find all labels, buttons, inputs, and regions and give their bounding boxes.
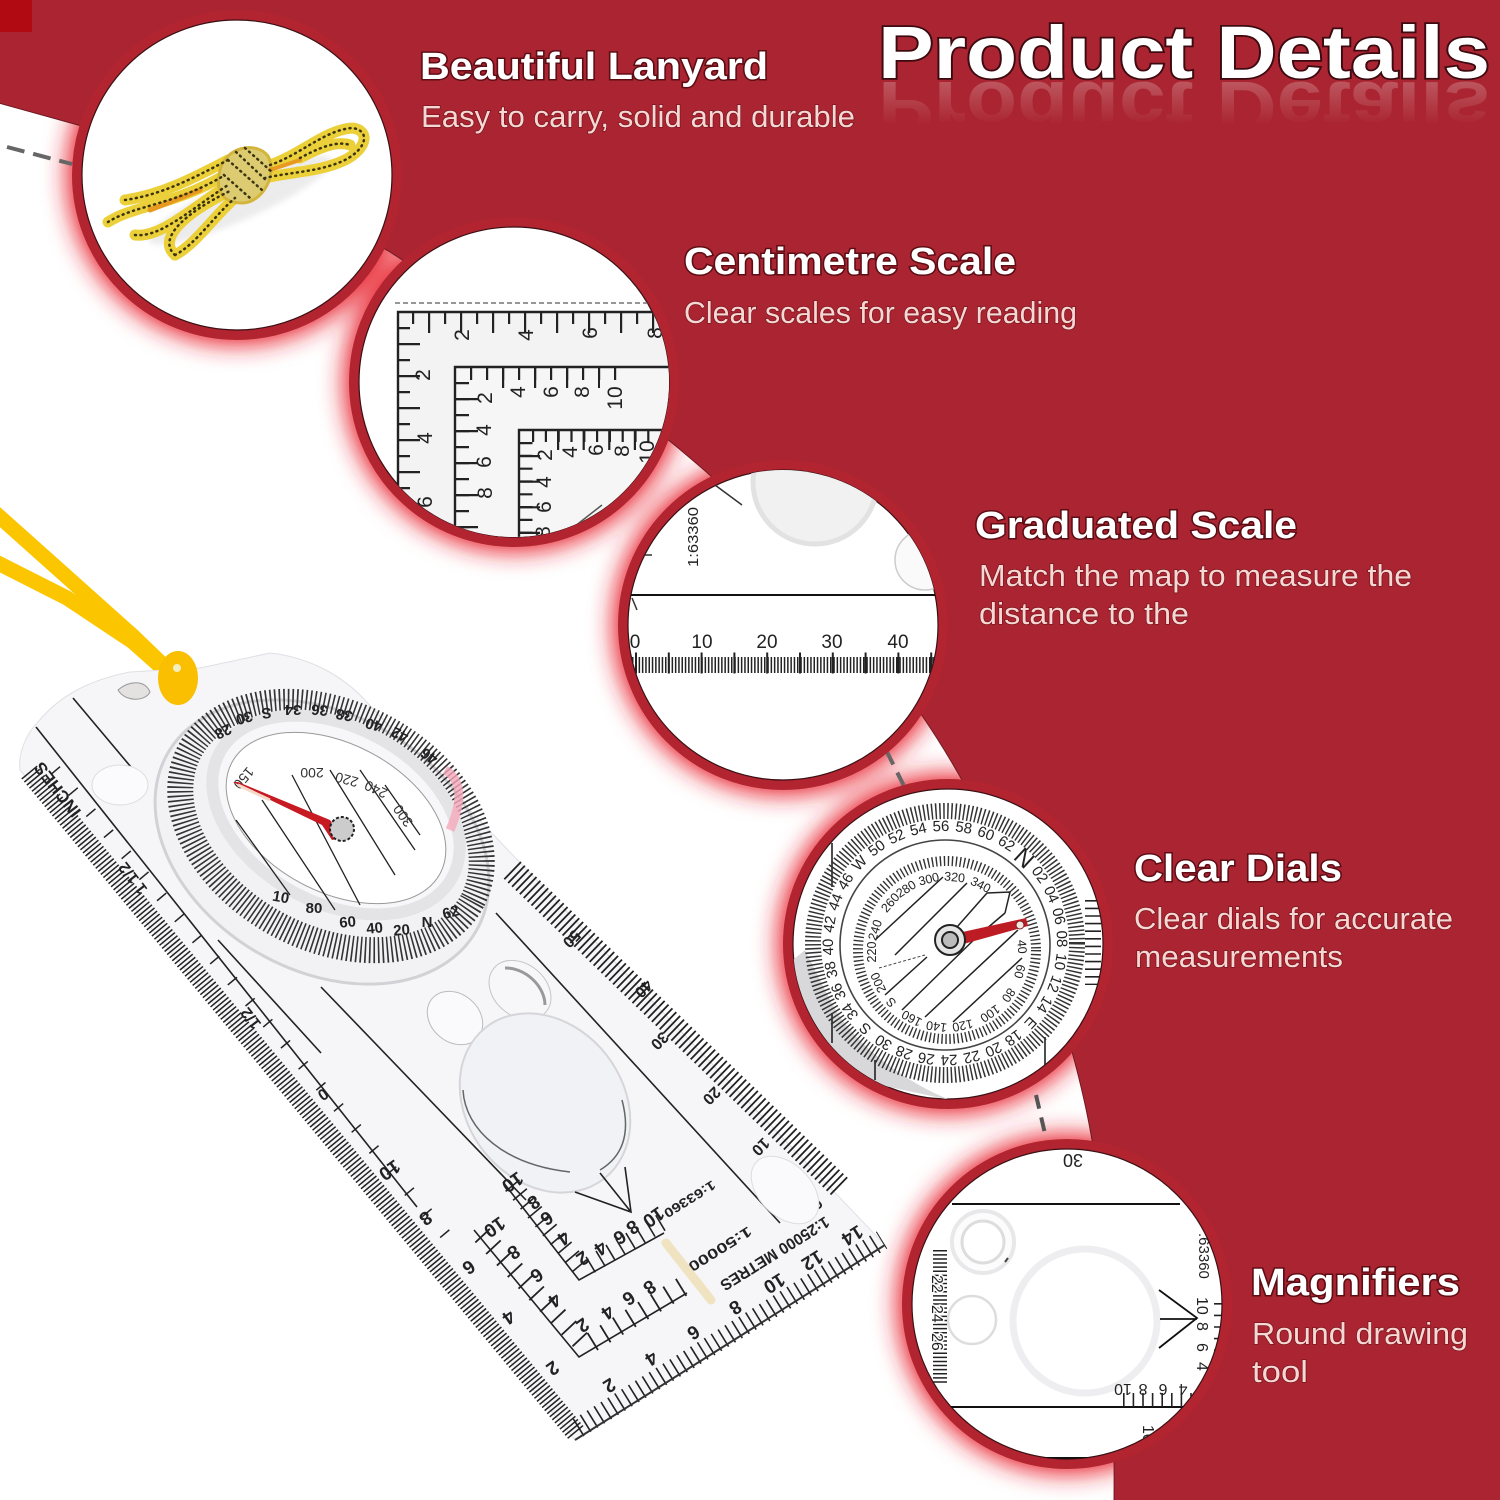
inner dial numbers: 300 bbox=[390, 802, 416, 830]
compass baseplate bbox=[20, 651, 885, 1440]
magnifier detail: 22 bbox=[928, 1275, 945, 1293]
dial detail: 220 bbox=[865, 942, 879, 962]
dial detail: 08 bbox=[1053, 930, 1070, 948]
icon: lanyard knot on plate bbox=[118, 651, 198, 705]
graduated scale detail: 40 bbox=[887, 632, 909, 653]
magnifier detail: 10 bbox=[1193, 1297, 1210, 1315]
graduated scale detail bbox=[630, 470, 936, 674]
glow halos around circles bbox=[67, 5, 1237, 1474]
magnifier detail: 10 bbox=[1139, 1425, 1156, 1443]
icon: coiled yellow cord bbox=[108, 128, 364, 255]
scale detail: 4 bbox=[559, 446, 582, 458]
dial detail: 200 bbox=[868, 970, 889, 995]
text block: Magnifiers bbox=[1251, 1262, 1468, 1389]
magnifier detail: 24 bbox=[928, 1305, 945, 1323]
text block: Beautiful Lanyard: Easy to carry, solid and durable bbox=[421, 99, 855, 134]
bottom ruler with numbers: 14 bbox=[837, 1220, 866, 1249]
scale detail: 6 bbox=[414, 496, 437, 508]
inner dial numbers: 200 bbox=[300, 765, 324, 781]
dial detail: 62 bbox=[995, 832, 1018, 856]
dial detail: 320 bbox=[943, 869, 966, 885]
text block: Clear Dials: Clear dials for accurate bbox=[1134, 901, 1453, 936]
magnifier detail: 26 bbox=[928, 1333, 945, 1351]
magnifier detail: 6 bbox=[1193, 1343, 1210, 1352]
left ruler: inch ticks bbox=[29, 758, 577, 1434]
text block: Magnifiers: Round drawing bbox=[1252, 1316, 1468, 1351]
bottom ruler with numbers: 8 bbox=[725, 1295, 745, 1318]
scale labels: 1:25000 METRES bbox=[717, 1213, 832, 1293]
outer square scale: 6 bbox=[526, 1263, 547, 1286]
dial detail: 38 bbox=[821, 960, 842, 980]
text block: Centimetre Scale: Centimetre Scale bbox=[684, 241, 1016, 283]
magnifier detail: 30 bbox=[1063, 1150, 1083, 1170]
left lower numbers: 4 bbox=[497, 1305, 519, 1328]
scale detail: 6 bbox=[473, 456, 496, 468]
left ruler: inch ticks: INCHES bbox=[30, 758, 85, 821]
dial detail: 46 bbox=[834, 870, 858, 893]
text block: Clear Dials bbox=[1134, 848, 1453, 974]
scale detail: 2 bbox=[474, 392, 497, 404]
scale detail: 8 bbox=[532, 526, 555, 538]
scale detail: 6 bbox=[579, 327, 602, 339]
bottom ruler with numbers: 6 bbox=[683, 1320, 703, 1343]
dial detail: 44 bbox=[825, 891, 847, 913]
text block: Magnifiers: tool bbox=[1252, 1354, 1308, 1389]
dial detail: 120 bbox=[951, 1016, 974, 1034]
right ruler: centimetre ticks bbox=[512, 870, 840, 1212]
dial detail: 22 bbox=[962, 1046, 982, 1067]
bezel numbers: 46 bbox=[418, 744, 441, 767]
scale detail: 2 bbox=[451, 329, 474, 341]
bottom ruler with numbers: 10 bbox=[759, 1268, 788, 1297]
dial detail: 06 bbox=[1048, 906, 1069, 926]
inner dial numbers bbox=[230, 764, 416, 830]
bezel numbers: 80 bbox=[306, 900, 322, 917]
dial detail: 50 bbox=[865, 837, 889, 860]
right ruler: centimetre ticks: 0 bbox=[807, 1194, 825, 1212]
outer square scale: 6 bbox=[618, 1286, 639, 1309]
dial detail: 52 bbox=[886, 826, 908, 848]
dial detail: 40 bbox=[1014, 939, 1029, 954]
dial detail: 10 bbox=[1050, 952, 1070, 971]
bezel numbers: 28 bbox=[212, 720, 234, 742]
graduated scale detail: 30 bbox=[821, 632, 843, 653]
dial detail: 14 bbox=[1032, 993, 1056, 1016]
outer square scale: 4 bbox=[543, 1288, 565, 1311]
bottom ruler with numbers: 12 bbox=[797, 1245, 826, 1274]
orienting lines bbox=[236, 770, 420, 910]
text block: Clear Dials: measurements bbox=[1135, 939, 1343, 974]
outer square scale: 4 bbox=[596, 1300, 618, 1323]
dial detail: 04 bbox=[1040, 884, 1062, 906]
inner square scale bbox=[497, 1167, 668, 1280]
text block: Graduated Scale bbox=[975, 505, 1412, 631]
dial detail: 80 bbox=[999, 985, 1018, 1005]
bezel numbers: 20 bbox=[393, 921, 411, 940]
dial detail: 100 bbox=[977, 1002, 1003, 1025]
dial detail: 20 bbox=[982, 1038, 1004, 1060]
outer square scale: 8 bbox=[639, 1275, 660, 1298]
bezel numbers: 10 bbox=[271, 888, 290, 907]
dial detail: S bbox=[883, 994, 899, 1010]
inner square scale: 6 bbox=[536, 1206, 557, 1229]
bezel numbers: 36 bbox=[311, 700, 329, 719]
dashed connector: circle 4 to 5 bbox=[1036, 1095, 1046, 1138]
bezel numbers: 42 bbox=[389, 723, 411, 745]
left lower numbers bbox=[374, 1155, 563, 1379]
scale detail: 4 bbox=[473, 424, 496, 436]
magnifier detail: 6 bbox=[1158, 1380, 1167, 1397]
title bbox=[878, 11, 1490, 149]
inner square scale: 8 bbox=[622, 1215, 643, 1238]
text block: Magnifiers: Magnifiers bbox=[1251, 1262, 1460, 1304]
corner square bbox=[0, 0, 32, 32]
inner square scale: 6 bbox=[609, 1225, 630, 1248]
outer square scale: 8 bbox=[503, 1240, 524, 1263]
dial detail: 54 bbox=[908, 819, 928, 840]
scale detail: 10 bbox=[604, 386, 627, 410]
dial detail: 56 bbox=[932, 818, 950, 835]
graduated scale detail: 10 bbox=[691, 632, 713, 653]
bezel numbers bbox=[212, 700, 461, 940]
outer square scale bbox=[474, 1212, 687, 1357]
scale detail: 2 bbox=[412, 369, 435, 381]
magnifier detail: 4 bbox=[1178, 1380, 1187, 1397]
dial detail: 280 bbox=[894, 878, 919, 901]
outer square scale: 2 bbox=[572, 1313, 593, 1336]
plate body bbox=[20, 653, 885, 1440]
outer square scale: 10 bbox=[479, 1212, 509, 1241]
bezel numbers: 62 bbox=[441, 902, 461, 923]
title: Product Details bbox=[878, 11, 1490, 94]
dial detail: 18 bbox=[1001, 1026, 1025, 1049]
circle 5: magnifiers bbox=[907, 1144, 1227, 1464]
scale labels: 1:50000 bbox=[685, 1223, 755, 1275]
dial detail: S bbox=[856, 1019, 875, 1038]
scale detail: 4 bbox=[515, 329, 538, 341]
dial detail: 60 bbox=[1011, 963, 1028, 980]
bezel numbers: 38 bbox=[335, 705, 354, 724]
left lower numbers: 8 bbox=[415, 1206, 436, 1229]
text block: Beautiful Lanyard: Beautiful Lanyard bbox=[420, 46, 768, 88]
circle 2: centimetre scale bbox=[354, 222, 698, 552]
pink fluid bbox=[445, 770, 459, 830]
dial detail: 34 bbox=[839, 999, 862, 1023]
text block: Graduated Scale: Graduated Scale bbox=[975, 505, 1297, 547]
right ruler: centimetre ticks: 30 bbox=[647, 1028, 671, 1053]
right ruler: centimetre ticks: 40 bbox=[631, 976, 655, 1001]
compass capsule bbox=[104, 642, 540, 1042]
dial detail: 300 bbox=[917, 870, 941, 889]
left ruler: inch ticks: 0 bbox=[314, 1084, 331, 1103]
left lower numbers: 6 bbox=[458, 1255, 479, 1278]
degree tick ring bbox=[137, 652, 525, 1000]
scale detail: 4 bbox=[533, 476, 556, 488]
magnifier detail: :63360 bbox=[1195, 1233, 1212, 1279]
bezel numbers: 30 bbox=[234, 707, 254, 728]
icon: red compass needle bbox=[233, 782, 354, 841]
icon: red needle bbox=[935, 918, 1028, 955]
scale detail: 4 bbox=[507, 386, 530, 398]
magnifier detail: 4 bbox=[1193, 1362, 1210, 1371]
bottom ruler with numbers: 4 bbox=[641, 1346, 661, 1370]
lanyard cord bbox=[0, 510, 160, 666]
inner square scale: 8 bbox=[523, 1190, 544, 1213]
inner square scale: 4 bbox=[589, 1236, 611, 1259]
bezel numbers: 40 bbox=[364, 714, 384, 735]
left ruler: inch ticks: 1/2 bbox=[238, 1004, 265, 1032]
inner square scale: 10 bbox=[497, 1167, 527, 1196]
scale detail: 10 bbox=[636, 440, 659, 464]
magnifier detail: 10 bbox=[1114, 1380, 1132, 1397]
dial detail: 40 bbox=[820, 938, 837, 956]
scale detail: 6 bbox=[533, 501, 556, 513]
dial detail: 26 bbox=[917, 1048, 936, 1068]
outer bezel bbox=[104, 642, 540, 1042]
scale detail: 8 bbox=[474, 487, 497, 499]
dial detail: 340 bbox=[968, 874, 993, 896]
dashed connector: left bbox=[7, 147, 72, 164]
left lower numbers: 10 bbox=[374, 1155, 404, 1184]
right ruler: centimetre ticks: 20 bbox=[699, 1083, 723, 1108]
inner square scale: 4 bbox=[552, 1226, 574, 1249]
scale detail: 8 bbox=[611, 445, 634, 457]
scale detail: 6 bbox=[585, 444, 608, 456]
dial detail: 140 bbox=[925, 1018, 948, 1035]
right ruler: centimetre ticks: 50 bbox=[559, 926, 583, 951]
magnifier detail bbox=[928, 1150, 1218, 1458]
scale detail: 6 bbox=[540, 386, 563, 398]
printed lines bbox=[36, 698, 780, 1223]
dial detail: 12 bbox=[1043, 973, 1065, 995]
left lower numbers: 2 bbox=[542, 1356, 563, 1379]
cream strip bbox=[666, 1243, 711, 1300]
dial detail: 160 bbox=[899, 1007, 924, 1029]
dial detail: N bbox=[1008, 843, 1039, 874]
text block: Beautiful Lanyard bbox=[420, 46, 855, 134]
glass bbox=[197, 697, 475, 939]
text block: Graduated Scale: distance to the bbox=[979, 596, 1189, 631]
right ruler: centimetre ticks: 10 bbox=[748, 1134, 772, 1159]
bottom ruler with numbers: 2 bbox=[599, 1373, 619, 1396]
graduated scale detail: 20 bbox=[756, 632, 778, 653]
left ruler: inch ticks: 1 1/2 bbox=[116, 858, 151, 897]
magnifier lenses on plate bbox=[92, 765, 832, 1237]
title: Product Details bbox=[878, 66, 1490, 149]
graduated scale detail: 1:63360 bbox=[685, 507, 702, 567]
dial detail: 36 bbox=[828, 980, 850, 1002]
inner capsule bbox=[178, 675, 494, 955]
text block: Clear Dials: Clear Dials bbox=[1134, 848, 1342, 890]
dial detail: W bbox=[849, 852, 871, 875]
inner dial numbers: 150 bbox=[230, 764, 257, 792]
bezel numbers: 40 bbox=[366, 919, 384, 938]
circle 4: clear dials bbox=[788, 784, 1108, 1104]
bezel numbers: 60 bbox=[339, 913, 357, 932]
bezel numbers: S bbox=[261, 704, 272, 721]
scale detail: 4 bbox=[414, 432, 437, 444]
dial detail: E bbox=[1021, 1013, 1040, 1032]
circle 1: lanyard bbox=[77, 15, 397, 335]
dial detail: 28 bbox=[893, 1041, 915, 1063]
circle 3: graduated scale bbox=[618, 469, 939, 790]
scale detail: 2 bbox=[534, 449, 557, 461]
bezel numbers: N bbox=[422, 914, 432, 931]
dial detail: 260 bbox=[878, 890, 903, 915]
scale labels bbox=[661, 1177, 832, 1293]
graduated scale detail: 0 bbox=[630, 632, 640, 653]
text block: Graduated Scale: Match the map to measure the bbox=[979, 558, 1412, 593]
inner square scale: 2 bbox=[572, 1246, 593, 1269]
dial detail: 60 bbox=[975, 823, 997, 845]
dial detail: 42 bbox=[820, 915, 840, 934]
inner dial numbers: 240 bbox=[362, 777, 390, 802]
scale detail bbox=[395, 302, 669, 537]
scale detail: 8 bbox=[644, 327, 667, 339]
dial detail: 24 bbox=[940, 1051, 958, 1068]
magnifier detail: 8 bbox=[1193, 1322, 1210, 1331]
scale labels: 1:63360 bbox=[661, 1177, 718, 1221]
dial detail: 02 bbox=[1028, 863, 1051, 887]
dial detail: 30 bbox=[872, 1030, 895, 1054]
scale detail: 8 bbox=[571, 386, 594, 398]
arrow mark bbox=[575, 1167, 631, 1212]
magnifier detail: 8 bbox=[1138, 1380, 1147, 1397]
inner dial numbers: 220 bbox=[333, 769, 360, 791]
dial detail bbox=[793, 811, 1093, 1100]
dashed connector: circle 3 to 4 bbox=[887, 752, 906, 790]
dial detail: 58 bbox=[954, 818, 973, 838]
dial detail: 240 bbox=[866, 918, 885, 942]
text block: Centimetre Scale bbox=[684, 241, 1077, 330]
text block: Centimetre Scale: Clear scales for easy reading bbox=[684, 295, 1077, 330]
bezel numbers: 34 bbox=[284, 701, 301, 718]
inner square scale: 10 bbox=[638, 1202, 668, 1231]
bottom ruler with numbers bbox=[575, 1220, 885, 1440]
